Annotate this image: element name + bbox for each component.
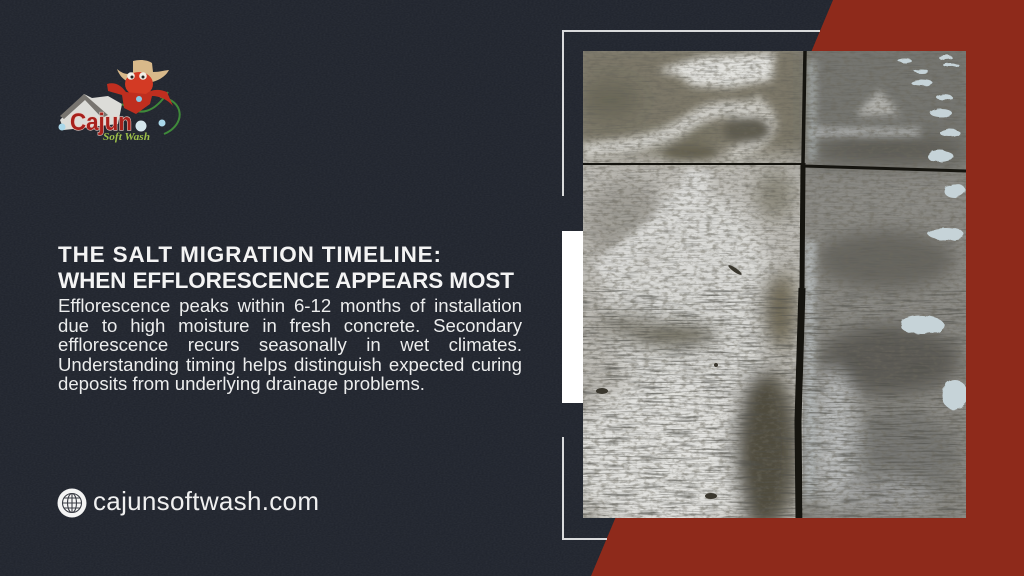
body text: efflorescence recurs seasonally in wet climates. — [58, 334, 522, 355]
hose — [160, 97, 180, 134]
body text: deposits from underlying drainage problems. — [58, 373, 425, 394]
website url: cajunsoftwash.com — [93, 486, 319, 516]
body text: Efflorescence peaks within 6-12 months of installation — [58, 295, 522, 316]
photo: concrete slab with efflorescence — [583, 51, 966, 518]
heading: THE SALT MIGRATION TIMELINE: — [58, 242, 441, 267]
logo: Cajun Soft Wash: Soft Wash — [103, 131, 150, 143]
red diagonal panel — [591, 0, 1024, 576]
wordmark: Cajun — [70, 109, 132, 136]
house — [60, 94, 122, 130]
body text: Understanding timing helps distinguish expected curing — [58, 354, 522, 374]
hat — [117, 60, 169, 84]
concrete base tones — [583, 51, 803, 518]
white frame around photo — [562, 31, 820, 539]
dark pits — [596, 264, 743, 499]
body text: due to high moisture in fresh concrete. Secondary — [58, 314, 522, 336]
bubbles — [58, 96, 166, 132]
pavement joints — [583, 51, 966, 518]
white salt bloom — [657, 52, 775, 88]
blurred stains — [570, 40, 975, 530]
eyes — [127, 72, 147, 80]
heading: WHEN EFFLORESCENCE APPEARS MOST — [58, 268, 514, 293]
horizontal and noise texture — [583, 51, 966, 518]
crawfish body — [125, 72, 153, 96]
icon: globe — [58, 488, 86, 518]
white spots along right edge — [897, 55, 968, 410]
body text — [58, 295, 522, 394]
